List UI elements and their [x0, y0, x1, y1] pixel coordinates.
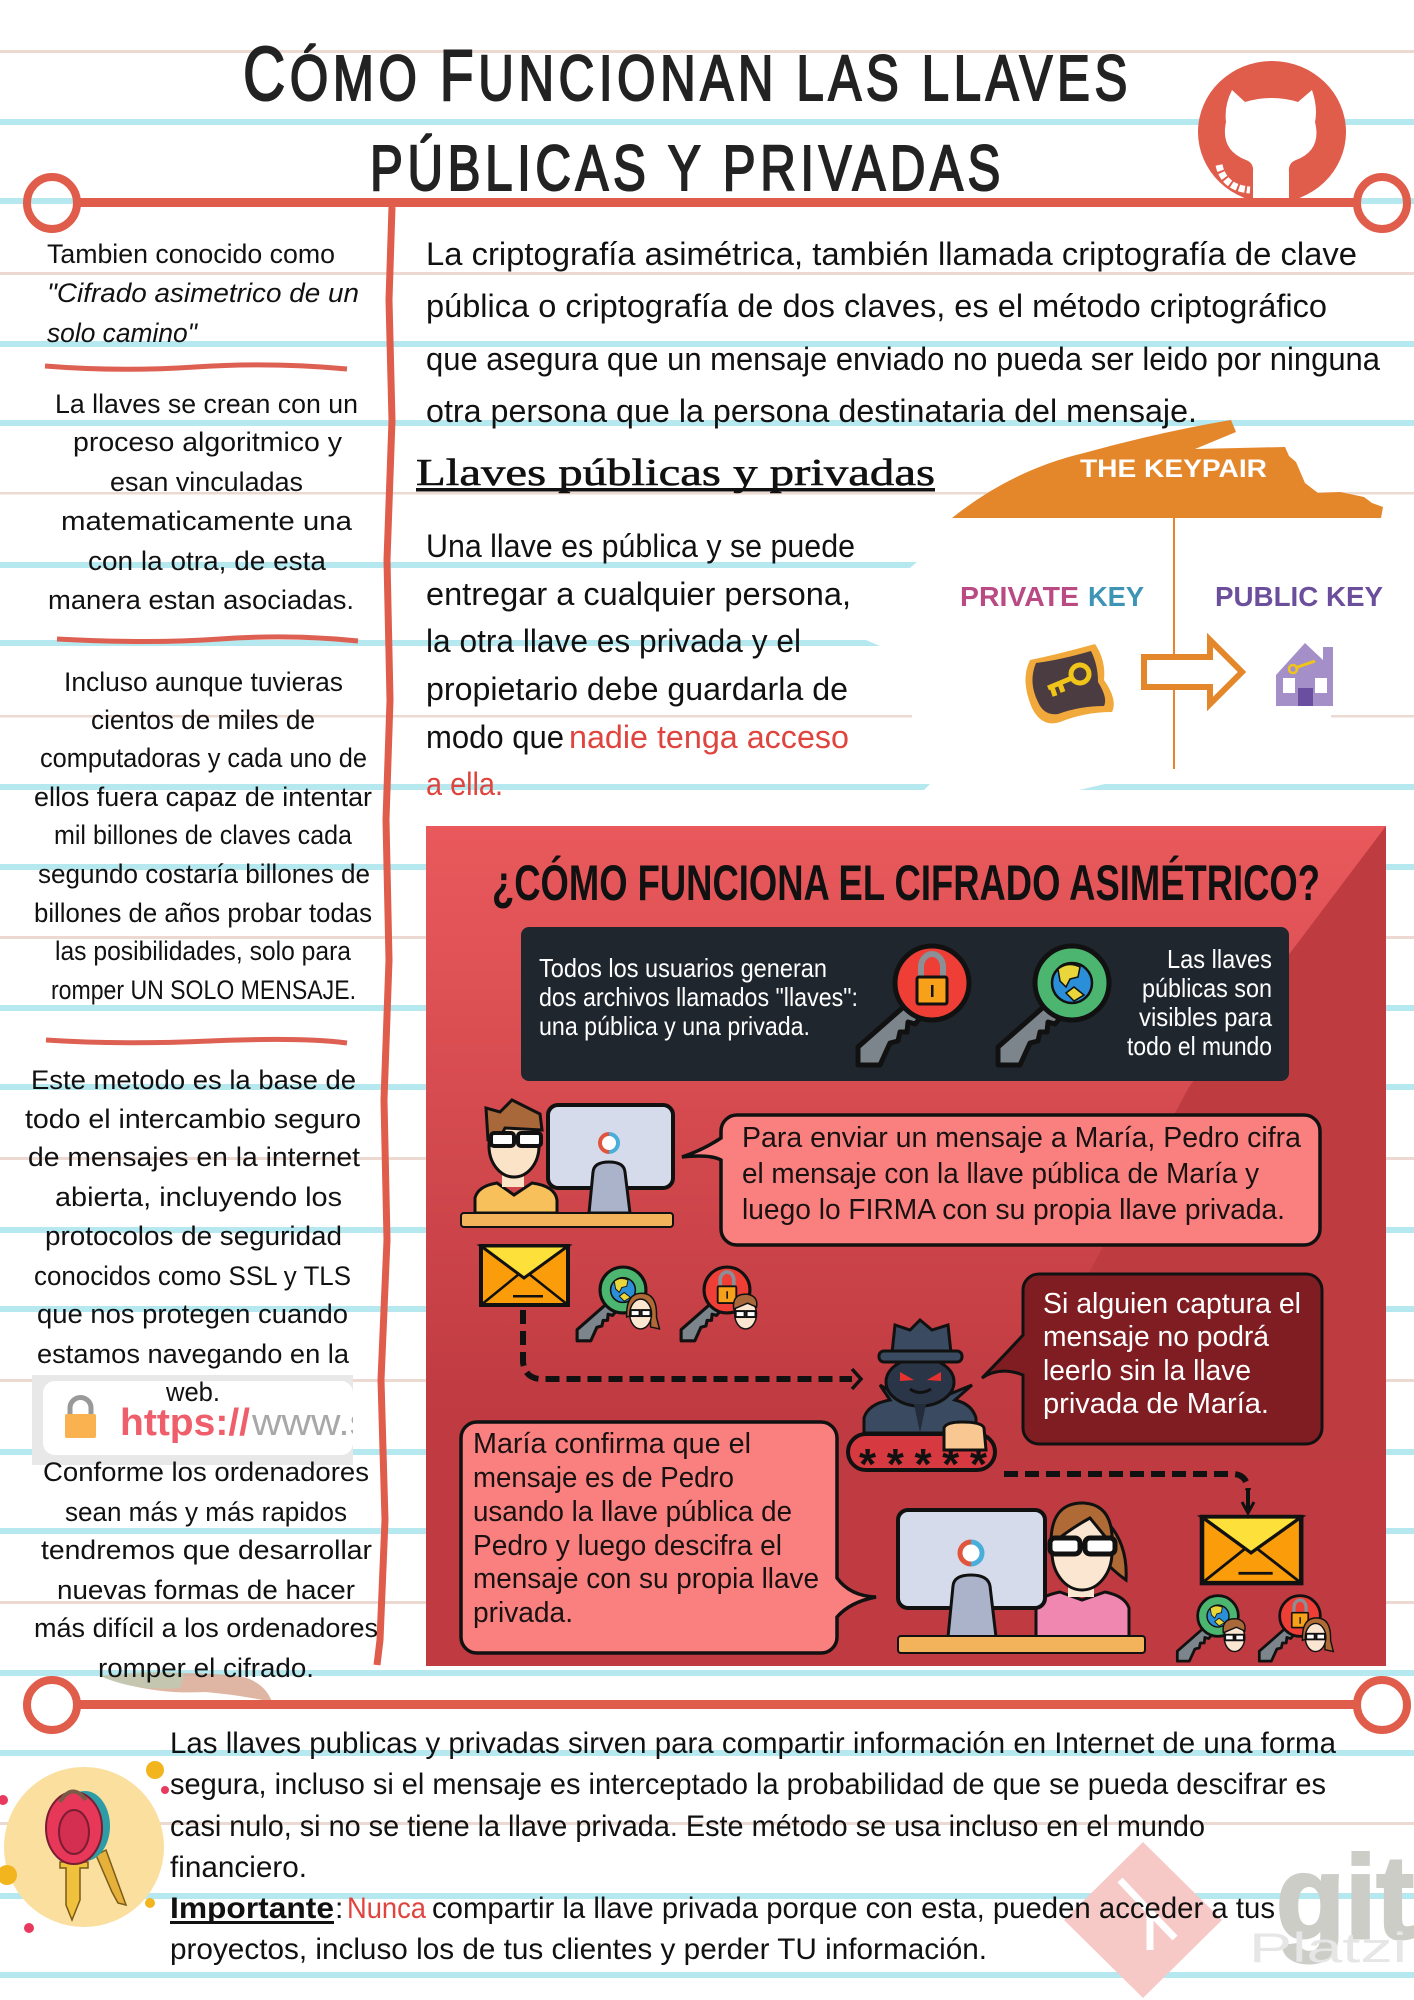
note: also known as — [47, 239, 359, 348]
note: brute force cost: romper UN SOLO MENSAJE. — [51, 975, 356, 1005]
warning paragraph: compartir la llave privada porque con esta, pueden acceder a tus — [432, 1892, 1275, 1925]
figure: spy — [848, 1320, 995, 1489]
warning paragraph — [170, 1892, 1275, 1966]
private key label — [960, 581, 1144, 612]
speech bubble: pedro: luego lo FIRMA con su propia llave privada. — [742, 1194, 1285, 1226]
icon: maria private key — [1259, 1596, 1333, 1661]
speech bubble: maria: usando la llave pública de — [473, 1496, 792, 1528]
note: brute force cost: Incluso aunque tuvieras — [64, 667, 343, 697]
public key label: PUBLIC KEY — [1215, 581, 1383, 612]
intro paragraph: otra persona que la persona destinataria del mensaje. — [426, 393, 1197, 429]
icon: private key — [1025, 644, 1114, 723]
note: brute force cost — [34, 667, 372, 1005]
icon: keys in yellow circle — [0, 1761, 169, 1933]
note: internet security: protocolos de seguridad — [45, 1221, 342, 1251]
note: brute force cost: cientos de miles de — [91, 705, 315, 735]
note: faster computers: nuevas formas de hacer — [57, 1575, 355, 1605]
speech bubble: spy warning — [982, 1274, 1322, 1444]
speech bubble: maria: mensaje es de Pedro — [473, 1462, 734, 1494]
brush stroke decoration — [100, 1672, 272, 1702]
speech bubble: pedro: el mensaje con la llave pública de María y — [742, 1158, 1259, 1190]
note: key generation: manera estan asociadas. — [48, 585, 354, 615]
note: internet security: que nos protegen cuando — [37, 1299, 348, 1329]
speech bubble: maria — [461, 1422, 876, 1653]
sidebar: left column notes — [25, 239, 378, 1683]
note: brute force cost: ellos fuera capaz de intentar — [34, 782, 372, 812]
paragraph: public and private key: entregar a cualquier persona, — [426, 576, 851, 612]
vertical divider line — [377, 207, 392, 1665]
speech bubble: maria: mensaje con su propia llave — [473, 1563, 819, 1595]
speech bubble: maria: privada. — [473, 1597, 573, 1629]
speech bubble: maria: Pedro y luego descifra el — [473, 1530, 782, 1562]
speech bubble: pedro: Para enviar un mensaje a María, Pedro cifra — [742, 1122, 1302, 1154]
figure: spy: ***** — [859, 1440, 988, 1489]
paragraph: public and private key: la otra llave es privada y el — [426, 623, 801, 659]
intro paragraph — [426, 236, 1380, 429]
speech bubble: spy warning: leerlo sin la llave — [1043, 1355, 1251, 1387]
dark box: keys explanation: Todos los usuarios generan — [539, 953, 827, 983]
icon: house — [1276, 643, 1333, 706]
note: key generation: proceso algoritmico y — [73, 427, 343, 457]
warning paragraph: : — [335, 1892, 343, 1925]
keypair label: THE KEYPAIR — [1080, 455, 1267, 483]
dark box: keys explanation: públicas son — [1142, 973, 1272, 1003]
watermark: git platzi logo — [1064, 1832, 1414, 1998]
figure: maria at computer — [898, 1503, 1145, 1653]
note: also known as: "Cifrado asimetrico de un — [47, 278, 359, 308]
intro paragraph: que asegura que un mensaje enviado no pueda ser leido por ninguna — [426, 341, 1380, 377]
notebook lines (blue and pink rules) — [0, 50, 1414, 53]
note: internet security: conocidos como SSL y TLS — [34, 1261, 351, 1291]
note: brute force cost: las posibilidades, solo para — [55, 936, 352, 966]
figure: pedro at computer — [461, 1100, 673, 1227]
dark box: keys explanation: visibles para — [1139, 1002, 1272, 1032]
paragraph: public and private key: modo que — [426, 719, 564, 755]
paragraph: public and private key: nadie tenga acceso — [569, 719, 849, 755]
diagram: the keypair — [952, 420, 1383, 769]
speech bubble: spy warning: Si alguien captura el — [1043, 1288, 1301, 1320]
note: faster computers: más difícil a los ordenadores — [34, 1613, 378, 1643]
divider: top bar with rings — [27, 177, 1407, 229]
note: key generation: esan vinculadas — [110, 467, 303, 497]
note: faster computers: tendremos que desarrollar — [41, 1535, 372, 1565]
conclusion paragraph: financiero. — [170, 1851, 307, 1884]
conclusion paragraph: segura, incluso si el mensaje es interceptado la probabilidad de que se pueda descifrar es — [170, 1768, 1326, 1801]
icon: envelope — [481, 1246, 568, 1305]
panel: como funciona el cifrado asimetrico — [426, 826, 1386, 1666]
note: internet security: todo el intercambio seguro — [25, 1104, 361, 1134]
note: key generation: con la otra, de esta — [88, 546, 327, 576]
note: also known as: solo camino" — [47, 318, 198, 348]
note: faster computers: romper el cifrado. — [98, 1653, 314, 1683]
paragraph: public and private key — [426, 528, 855, 802]
divider: bottom bar with rings — [27, 1680, 1407, 1730]
note: brute force cost: mil billones de claves cada — [54, 820, 353, 850]
title: PÚBLICAS Y PRIVADAS — [370, 132, 1005, 204]
dark box: keys explanation: Las llaves — [1167, 944, 1272, 974]
note: key generation: matematicamente una — [61, 506, 353, 536]
speech bubble: pedro — [682, 1115, 1320, 1245]
watermark: git platzi logo: Platzi — [1249, 1924, 1407, 1971]
icon: github octocat — [1198, 61, 1346, 203]
intro paragraph: pública o criptografía de dos claves, es el método criptográfico — [426, 288, 1327, 324]
paragraph: public and private key: a ella. — [426, 766, 503, 802]
dark box: keys explanation: todo el mundo — [1127, 1031, 1272, 1061]
warning paragraph: Importante — [170, 1892, 334, 1925]
title — [243, 32, 1132, 204]
conclusion paragraph — [170, 1727, 1336, 1884]
dashed arrow: to spy — [523, 1310, 861, 1389]
speech bubble: spy warning: privada de María. — [1043, 1388, 1269, 1420]
note: faster computers: sean más y más rapidos — [65, 1497, 347, 1527]
private key label: PRIVATE — [960, 581, 1079, 612]
arrow — [1144, 640, 1242, 704]
intro paragraph: La criptografía asimétrica, también llamada criptografía de clave — [426, 236, 1357, 272]
dashed arrow: to maria — [1004, 1474, 1254, 1513]
note: brute force cost: computadoras y cada uno de — [40, 743, 367, 773]
note: brute force cost: segundo costaría billones de — [38, 859, 370, 889]
note: faster computers: Conforme los ordenadores — [43, 1457, 369, 1487]
icon: pedro public key — [1177, 1596, 1245, 1661]
note: internet security: web. — [165, 1377, 220, 1407]
conclusion paragraph: Las llaves publicas y privadas sirven para compartir información en Internet de una forma — [170, 1727, 1336, 1760]
note: internet security: estamos navegando en la — [37, 1339, 350, 1369]
dark box: keys explanation: dos archivos llamados "llaves": — [539, 982, 858, 1012]
note: also known as: Tambien conocido como — [47, 239, 335, 269]
heading: llaves publicas y privadas: Llaves públicas y privadas — [416, 452, 935, 494]
image: https address bar: www.s — [251, 1402, 370, 1444]
private key label: KEY — [1088, 581, 1144, 612]
image: https address bar: https:// — [120, 1402, 250, 1444]
speech bubble: spy warning: mensaje no podrá — [1043, 1321, 1270, 1353]
note: internet security: de mensajes en la internet — [28, 1142, 361, 1172]
note: key generation — [48, 389, 358, 615]
icon: envelope received — [1202, 1517, 1301, 1583]
warning paragraph: proyectos, incluso los de tus clientes y perder TU información. — [170, 1933, 987, 1966]
icon: maria public key — [577, 1267, 659, 1341]
speech bubble: maria: María confirma que el — [473, 1428, 751, 1460]
paragraph: public and private key: Una llave es pública y se puede — [426, 528, 855, 564]
note: internet security — [25, 1065, 361, 1407]
paragraph: public and private key: propietario debe guardarla de — [426, 671, 848, 707]
conclusion paragraph: casi nulo, si no se tiene la llave privada. Este método se usa incluso en el mundo — [170, 1810, 1205, 1843]
icon: pedro private key — [681, 1267, 757, 1341]
title: CÓMO FUNCIONAN LAS LLAVES — [243, 32, 1132, 117]
note: key generation: La llaves se crean con un — [55, 389, 358, 419]
note: internet security: abierta, incluyendo los — [55, 1182, 342, 1212]
note: brute force cost: billones de años probar todas — [34, 898, 372, 928]
umbrella shape — [952, 420, 1383, 518]
dark box: keys explanation: una pública y una privada. — [539, 1011, 810, 1041]
note: faster computers — [34, 1457, 378, 1683]
image: https address bar — [32, 1375, 370, 1465]
warning paragraph: Nunca — [347, 1892, 426, 1925]
dark box: keys explanation — [521, 927, 1289, 1081]
note: internet security: Este metodo es la base de — [31, 1065, 356, 1095]
